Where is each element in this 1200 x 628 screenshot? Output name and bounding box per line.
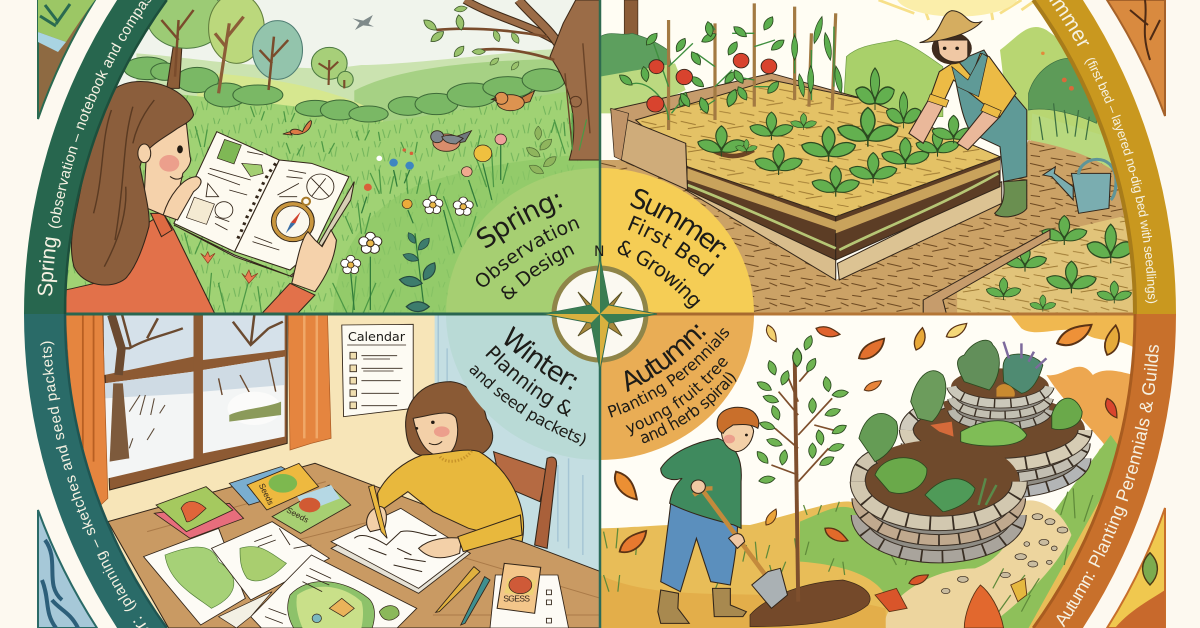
label: summer: & Growing <box>618 240 700 309</box>
label: autumn: young fruit tree <box>626 358 728 437</box>
curtains <box>66 315 331 505</box>
farmer in overalls <box>909 11 1027 217</box>
young fruit tree <box>754 334 849 602</box>
grass and strokes <box>185 107 586 313</box>
label: spring: Observation <box>476 219 580 287</box>
woman: back hair and orange jumper <box>66 82 315 314</box>
sky bird <box>352 15 374 30</box>
label: winter: and seed packets) <box>470 365 586 446</box>
hands <box>163 177 336 292</box>
raised no-dig bed <box>611 73 1002 280</box>
open spiral notebook <box>174 132 354 277</box>
sketchbook under her hand <box>331 508 470 593</box>
ring text: autumn: Autumn: <box>1056 571 1095 628</box>
ring: winter segment <box>24 314 167 628</box>
back trees and hedge <box>601 0 1112 170</box>
label: summer <box>618 188 727 309</box>
centre pie: winter <box>446 314 600 460</box>
ring: spring segment <box>24 0 167 314</box>
map sketches <box>144 522 417 628</box>
label: summer: Summer: <box>630 188 727 258</box>
watering can <box>1043 159 1116 213</box>
sun rays <box>879 0 1036 20</box>
label: spring: Spring: <box>476 194 562 248</box>
far bed edge <box>923 230 1050 314</box>
label: autumn: Planting Perennials <box>608 328 730 418</box>
calendar on wall: Calendar <box>348 329 406 344</box>
seed packets <box>154 463 351 538</box>
man digging with spade <box>658 407 787 623</box>
orange foliage <box>1011 315 1136 348</box>
hands and arm <box>367 485 522 558</box>
window with snow <box>102 315 287 490</box>
ring text: winter: (planning – sketches and seed packets) <box>40 342 136 612</box>
herbs on spiral <box>859 340 1082 512</box>
label: summer: First Bed <box>628 216 714 277</box>
herb spiral: middle tier <box>906 395 1085 493</box>
compass rose <box>543 258 657 370</box>
panel: winter planning scene <box>40 315 602 628</box>
corner: bottom-left water <box>38 510 97 628</box>
ring text: autumn: Planting Perennials & Guilds <box>1088 345 1159 568</box>
corner: bottom-right autumn pattern <box>1107 508 1165 628</box>
panel: summer first bed scene <box>600 0 1161 314</box>
corner: top-right roots <box>1107 0 1165 116</box>
label: winter <box>470 326 586 446</box>
bushes <box>124 57 565 122</box>
corner: top-left leaves, water and soil <box>38 0 95 119</box>
background trees <box>147 0 353 93</box>
ring: autumn segment <box>1033 314 1176 628</box>
path pebbles <box>941 514 1068 594</box>
ring text: spring: Spring <box>38 237 61 296</box>
wooden table <box>108 463 601 628</box>
label: winter: Winter: <box>504 326 578 390</box>
panel: spring observation scene <box>40 0 601 314</box>
ring: summer segment <box>1033 0 1176 314</box>
seed packets: Seeds <box>257 482 276 506</box>
stakes and climbing tomatoes <box>617 3 844 130</box>
herb spiral: bottom tier <box>858 440 1020 557</box>
falling leaves <box>610 321 1124 628</box>
pie dividers <box>446 168 754 460</box>
panel: autumn planting scene <box>600 315 1161 628</box>
seed packets: Seeds <box>285 505 311 525</box>
ring text: spring <box>38 0 152 296</box>
label: autumn: and herb spiral) <box>640 372 736 444</box>
soil mound <box>750 580 870 627</box>
seedlings in bed <box>698 68 1134 312</box>
large oak tree <box>421 0 600 160</box>
chair <box>494 452 557 548</box>
calendar on wall <box>342 324 413 417</box>
list and seed packet at right <box>490 563 569 628</box>
centre pie: spring <box>446 168 600 314</box>
label: winter: Planning & <box>485 345 571 417</box>
ring text: summer <box>1049 0 1158 304</box>
compass on notebook <box>271 198 314 242</box>
mulched ground <box>600 140 1136 314</box>
centre pie: autumn <box>600 314 754 460</box>
birds <box>283 91 535 151</box>
grass strokes <box>604 488 1093 615</box>
autumn grass and path <box>600 448 1136 628</box>
herb spiral: top tier <box>951 368 1049 427</box>
label: autumn: Autumn: <box>624 324 706 392</box>
ring text: summer: (first bed – layered no-dig bed with seedlings) <box>1084 58 1158 304</box>
centre pie: summer <box>600 168 754 314</box>
ring text: autumn <box>1056 345 1159 628</box>
wildflowers <box>201 126 559 312</box>
list and seed packet at right: SGESS <box>503 594 530 604</box>
woman at table <box>377 382 524 542</box>
compass north label: N <box>594 244 604 260</box>
pencils <box>436 567 490 625</box>
label: spring: & Design <box>501 246 574 300</box>
